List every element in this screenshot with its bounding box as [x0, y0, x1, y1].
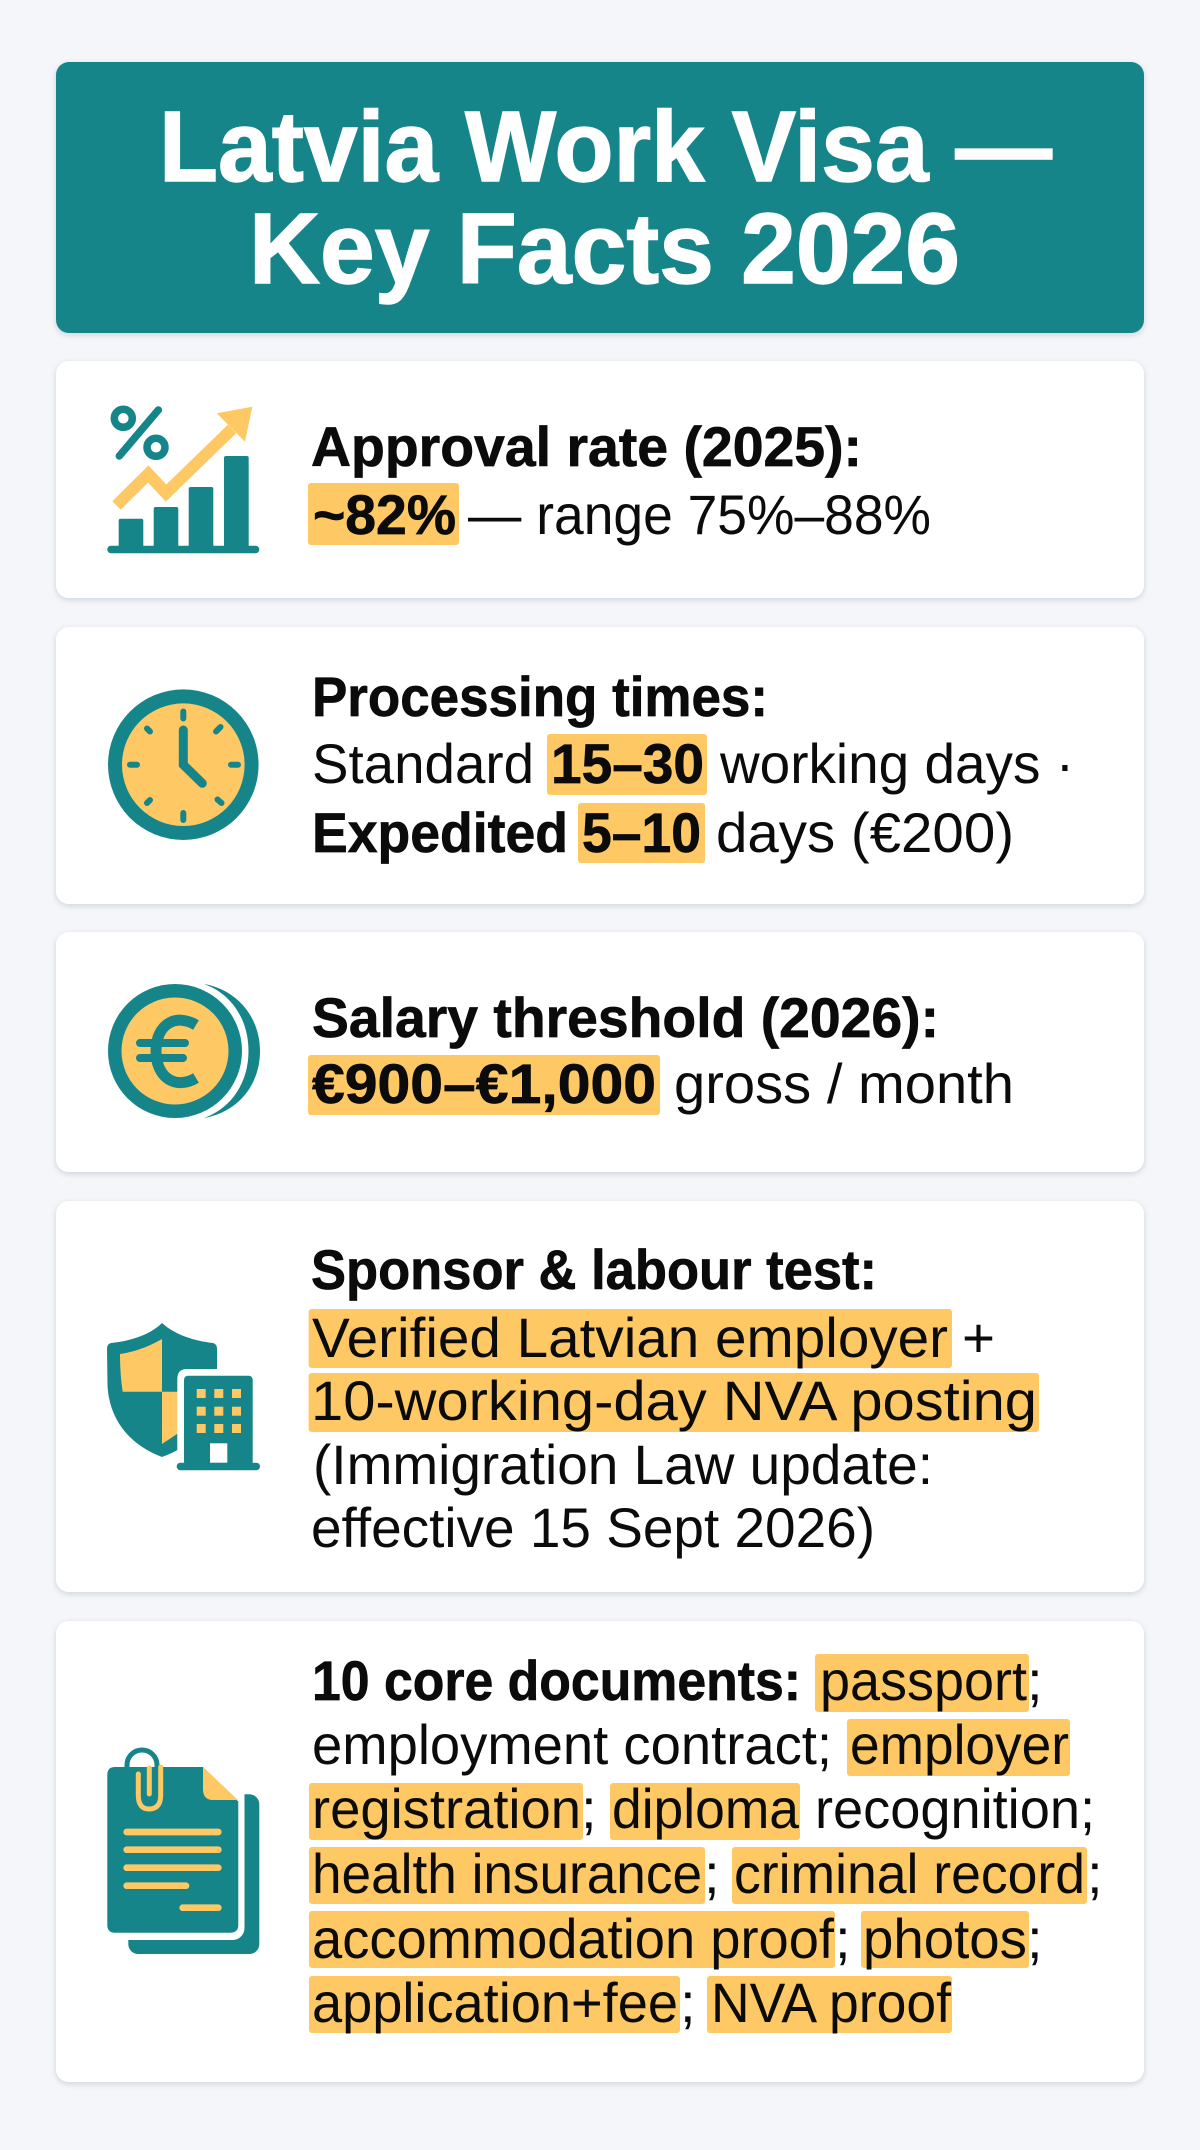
- text: core documents: ;: [1027, 1907, 1043, 1970]
- text: salary threshold: Salary threshold (2026):: [312, 986, 939, 1049]
- text: core documents: employer: [850, 1713, 1069, 1776]
- title banner: Key Facts 2026: [249, 193, 960, 305]
- text: core documents: employment contract;: [312, 1713, 832, 1776]
- text: core documents: ;: [835, 1907, 851, 1970]
- text: core documents: criminal record: [734, 1842, 1085, 1905]
- text: sponsor and labour test: +: [962, 1306, 995, 1369]
- panel: processing times: [56, 627, 1144, 904]
- text: sponsor and labour test: (Immigration Law update:: [313, 1433, 933, 1496]
- text: approval rate: [308, 415, 931, 546]
- text: core documents: ;: [680, 1971, 696, 2034]
- icon: growth chart with percent: [107, 407, 259, 553]
- title banner: [56, 62, 1144, 333]
- text: core documents: passport: [820, 1649, 1027, 1712]
- text: salary threshold: gross / month: [674, 1052, 1014, 1115]
- text: core documents: ;: [704, 1842, 720, 1905]
- icon: euro coin: [108, 984, 260, 1118]
- text: sponsor and labour test: Verified Latvian employer: [312, 1306, 948, 1369]
- panel: sponsor and labour test: [56, 1201, 1144, 1592]
- text: core documents: ;: [1027, 1649, 1043, 1712]
- text: sponsor and labour test: 10-working-day NVA posting: [311, 1369, 1037, 1432]
- icon: clipped documents: [100, 1750, 259, 1954]
- text: sponsor and labour test: Sponsor & labour test:: [311, 1238, 877, 1301]
- text: salary threshold: €900–€1,000: [312, 1052, 656, 1115]
- text: core documents: NVA proof: [711, 1971, 951, 2034]
- text: core documents: recognition;: [815, 1777, 1095, 1840]
- text: processing times: days (€200): [716, 801, 1014, 864]
- text: processing times: working days ·: [719, 732, 1074, 795]
- panel: approval rate: [56, 361, 1144, 598]
- text: core documents: health insurance: [312, 1842, 702, 1905]
- text: core documents: diploma: [612, 1777, 800, 1840]
- text: approval rate: Approval rate (2025):: [311, 415, 862, 478]
- text: approval rate: ~82%: [313, 483, 456, 546]
- text: core documents: photos: [863, 1907, 1027, 1970]
- text: sponsor and labour test: [309, 1238, 1039, 1559]
- text: core documents: accommodation proof: [312, 1907, 834, 1970]
- text: processing times: 15–30: [551, 732, 704, 795]
- text: processing times: 5–10: [582, 801, 701, 864]
- panel: core documents: [56, 1621, 1144, 2082]
- title banner: Latvia Work Visa —: [159, 91, 1052, 203]
- panel: salary threshold: [56, 932, 1144, 1172]
- text: core documents: [309, 1649, 1103, 2034]
- text: core documents: ;: [1087, 1842, 1103, 1905]
- icon: shield and building: [107, 1323, 262, 1476]
- icon: clock: [108, 689, 259, 840]
- text: sponsor and labour test: effective 15 Sept 2026): [311, 1496, 875, 1559]
- text: processing times: Standard: [312, 732, 534, 795]
- text: processing times: Expedited: [312, 801, 568, 864]
- text: approval rate: — range 75%–88%: [468, 483, 931, 546]
- text: core documents: ;: [581, 1777, 597, 1840]
- text: processing times: Processing times:: [312, 665, 768, 728]
- text: processing times: [312, 665, 1074, 864]
- text: core documents: application+fee: [312, 1971, 678, 2034]
- text: core documents: 10 core documents:: [312, 1649, 801, 1712]
- text: salary threshold: [308, 986, 1014, 1115]
- text: core documents: registration: [312, 1777, 581, 1840]
